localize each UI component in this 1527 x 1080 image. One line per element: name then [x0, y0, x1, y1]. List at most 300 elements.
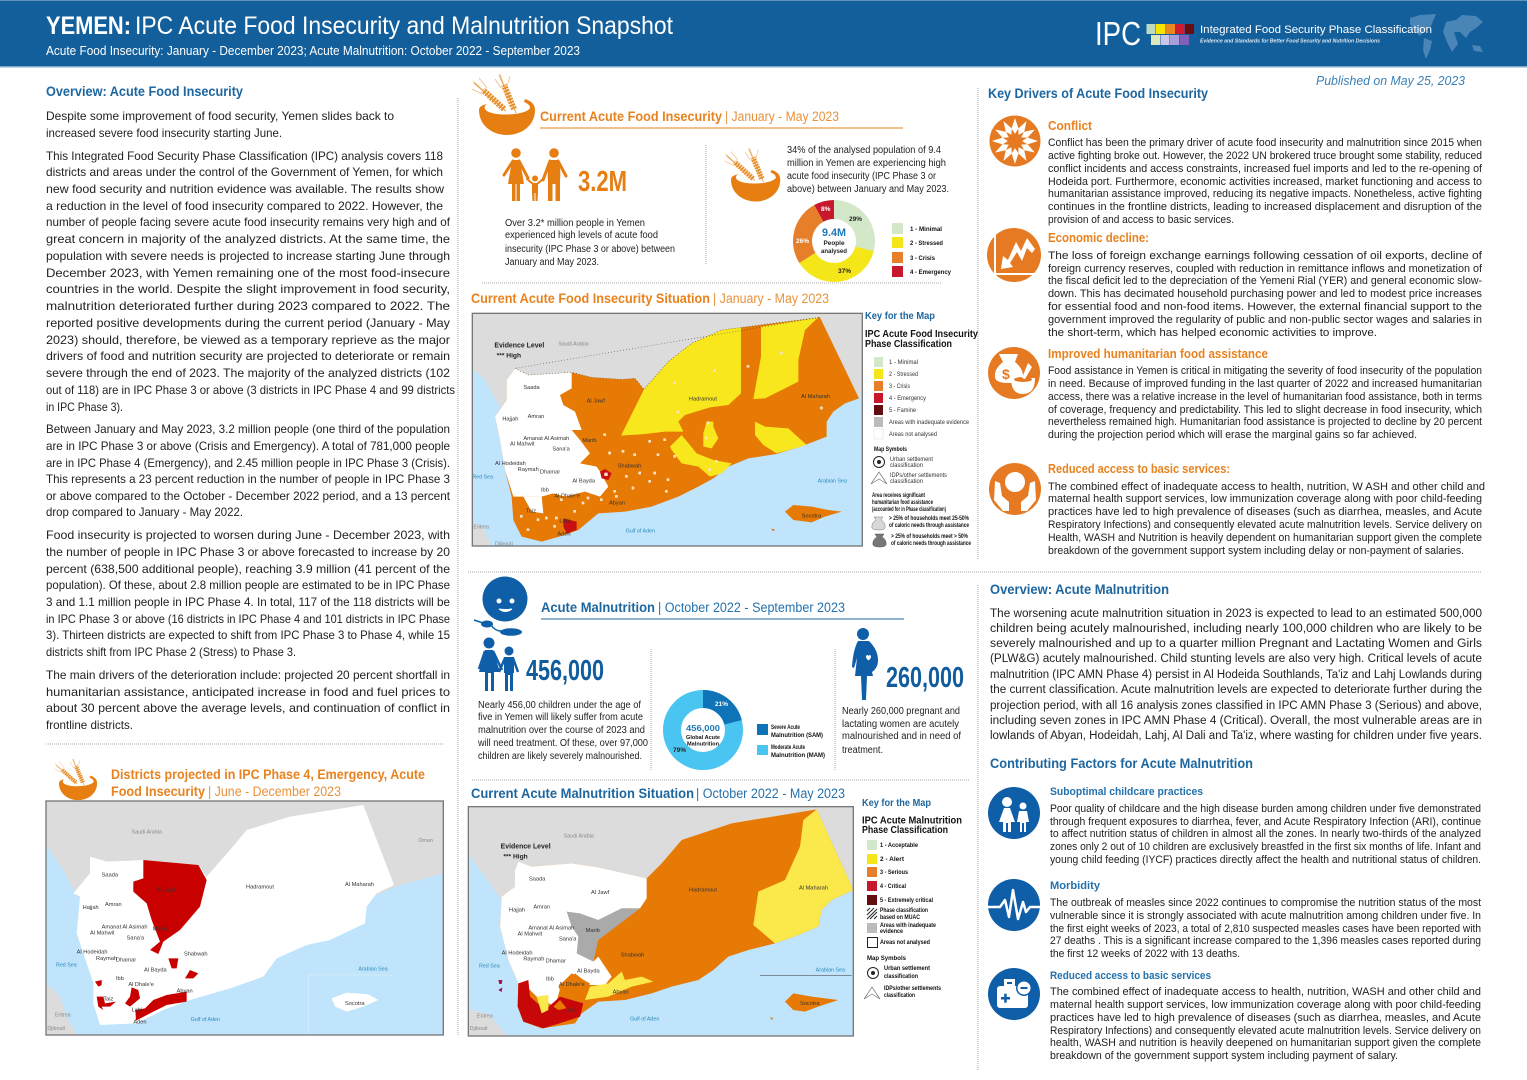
donut chart: population by phase: People [824, 240, 845, 247]
panel: projected phase 4 districts [46, 759, 443, 1035]
legend: malnutrition map key [862, 798, 962, 999]
subtitle: Acute Food Insecurity: January - December 2023; Acute Malnutrition: October 2022 - September 2023 [46, 43, 580, 58]
map: food insecurity phases: Al Bayda [572, 479, 596, 485]
map: projected phase 4 districts: Al Bayda [144, 968, 167, 974]
text block: reduced access to services: maternal health support services, low immunization coverage along with poor child-feeding [1050, 999, 1481, 1011]
map: malnutrition phases: Al Dhale'e [559, 982, 585, 988]
stat: 260,000: 260,000 [886, 662, 964, 694]
text block: economic decline: down. This has decimated household purchasing power and led to modest price increases [1048, 288, 1482, 300]
map: food insecurity phases: Amanat Al Asimah [523, 436, 569, 442]
text block: childcare: Poor quality of childcare and the high disease burden among children under five demonstrated [1050, 803, 1481, 815]
map: malnutrition phases [468, 807, 853, 1036]
text block: analysis coverage [46, 149, 455, 414]
panel: overview acute food insecurity [46, 84, 455, 732]
map: malnutrition phases: Al Jawf [591, 890, 610, 896]
map: projected phase 4 districts: Taiz [103, 997, 114, 1003]
map: projected phase 4 districts: Ibb [116, 976, 124, 982]
legend: malnutrition types: Malnutrition (MAM) [771, 753, 825, 759]
heading: key drivers: Key Drivers of Acute Food Insecurity [988, 86, 1208, 101]
legend: food insecurity map key: Key for the Map [865, 311, 935, 322]
text block: children description: five in Yemen will likely suffer from acute [478, 712, 643, 723]
legend: food insecurity map key: classification [890, 479, 923, 485]
text block: economic decline [1048, 231, 1483, 339]
text block: analysis coverage: new food security and nutrition evidence was available. The results show [46, 182, 444, 196]
map: projected phase 4 districts: Al Dhale'e [128, 982, 154, 988]
legend: donut phases [892, 223, 952, 277]
text block: conflict [1048, 119, 1483, 226]
IPC logo [1095, 14, 1483, 59]
map: projected phase 4 districts: Al Hodeidah [77, 949, 107, 955]
text block: reduced access: Health, WASH and Nutrition is heavily dependent on humanitarian support given the complete [1048, 532, 1482, 544]
text block: humanitarian assistance [1048, 347, 1482, 441]
text block: women description: treatment. [842, 745, 883, 756]
map: projected phase 4 districts: Oman [418, 838, 433, 844]
map: malnutrition phases: Amanat Al Asimah [528, 925, 574, 931]
map: projected phase 4 districts: Sana'a [127, 935, 145, 941]
legend: food insecurity map key: > 25% of households meet 25-50% [889, 516, 970, 522]
text block: reduced access to services: Respiratory Infections) and consequently elevated acute malnutrition levels. Service delivery on [1050, 1025, 1481, 1037]
text block: children description: will need treatment. Of these, over 97,000 [477, 738, 648, 749]
legend: malnutrition types: Malnutrition (SAM) [771, 733, 823, 739]
text block: analysis coverage: out of 118) are in IPC Phase 3 or above (3 districts in IPC Phase 4 and 99 districts [46, 383, 455, 397]
icon: hands and person [989, 463, 1041, 515]
map: projected phase 4 districts: Al Maharah [345, 882, 374, 888]
legend: food insecurity map key: Map Symbols [874, 447, 908, 453]
panel: key drivers [987, 86, 1485, 557]
text block: childcare: zones only 2 out of 10 children are exclusively breastfed in the first six months of life. Infant and [1050, 841, 1481, 853]
text block: reduced access: practices have led to high prevalence of diseases (such as diarrhea, measles, and Acute [1048, 506, 1482, 518]
text block: childcare: Suboptimal childcare practices [1050, 786, 1203, 798]
map: food insecurity phases: Al Mahwit [510, 441, 535, 447]
map: malnutrition phases: Hadramout [689, 888, 717, 894]
world map watermark [1410, 14, 1483, 59]
map: malnutrition phases: Al Maharah [799, 885, 828, 891]
text block: humanitarian assistance: of coverage, frequency and predictability. This led to slight decrease in food insecurity, which [1048, 404, 1482, 416]
donut chart: global acute malnutrition: 79% [673, 747, 686, 754]
legend: evidence level: *** High [503, 854, 528, 861]
text block: analysis coverage: great concern in majority of the analyzed districts. At the same time, the [46, 232, 450, 246]
text block: main drivers: humanitarian assistance, anticipated increase in food and fuel prices to [46, 685, 450, 699]
heading: malnutrition map: Current Acute Malnutrition Situation [471, 786, 694, 801]
text block: analysis coverage: drivers of food and nutrition security are projected to deteriorate or remain [46, 349, 450, 363]
text block: children description: Nearly 456,00 children under the age of [478, 700, 641, 711]
legend: food insecurity map key: IPC Acute Food Insecurity [865, 329, 978, 340]
stat: 456,000: 456,000 [526, 655, 604, 687]
map: food insecurity phases: Red Sea [472, 475, 493, 481]
text block: women description [842, 706, 961, 756]
text block: conflict: Conflict [1048, 119, 1093, 133]
map: malnutrition phases: Lahj [565, 1007, 576, 1013]
legend: evidence level: Evidence Level [494, 341, 544, 350]
icon: wheat bowl large [472, 74, 535, 135]
donut chart: global acute malnutrition: 456,000 [686, 723, 720, 733]
panel: overview acute malnutrition [990, 582, 1482, 742]
text block: women description: Nearly 260,000 pregnant and [842, 706, 960, 717]
text block: morbidity: vulnerable since it is strongly associated with acute malnutrition among children under five. In [1050, 910, 1481, 922]
donut chart: population by phase: 37% [838, 268, 851, 275]
map: malnutrition phases: Amran [533, 905, 550, 911]
donut chart: global acute malnutrition: Global Acute [686, 735, 720, 741]
text block: projection [46, 528, 450, 659]
text block: January to May figures: Between January and May 2023, 3.2 million people (one third of the population [46, 422, 450, 436]
map: projected phase 4 districts: Saada [102, 873, 119, 879]
heading: contributing factors: Contributing Factors for Acute Malnutrition [990, 756, 1253, 771]
legend: food insecurity map key: Areas not analysed [889, 432, 937, 438]
legend: malnutrition map key: 5 - Extremely critical [880, 898, 933, 904]
donut chart: population by phase: 8% [821, 206, 831, 213]
map: projected phase 4 districts: Raymah [96, 956, 117, 962]
text block: main drivers [46, 668, 450, 732]
text block: analysis coverage: number of people facing severe acute food insecurity remains very high and of [46, 215, 451, 229]
legend: evidence level [501, 842, 551, 861]
legend: food insecurity map key: Areas with inadequate evidence [889, 420, 970, 426]
text block: reduced access to services: breakdown of the government support system including payment of salary. [1050, 1050, 1398, 1062]
legend: malnutrition map key: IDPs/other settlements [884, 986, 942, 992]
map: projected phase 4 districts: Arabian Sea [358, 967, 388, 973]
text block: January to May figures: are in IPC Phase 3 or above (Crisis and Emergency). A total of 781,000 people [46, 439, 450, 453]
legend: malnutrition map key: classification [884, 974, 918, 980]
donut chart: population by phase: 26% [796, 238, 809, 245]
text block: reduced access: The combined effect of inadequate access to health, nutrition, W ASH and other child and [1048, 481, 1485, 493]
text block: malnutrition overview: the current classification. Acute malnutrition levels are expected to deteriorate further during the [990, 684, 1482, 696]
heading: projected districts: | June - December 2023 [208, 784, 341, 799]
map: malnutrition phases: Arabian Sea [816, 967, 845, 973]
text block: 34 percent description: above) between January and May 2023. [787, 184, 949, 195]
text block: childcare [1050, 786, 1481, 866]
text block: malnutrition overview: children being acutely malnourished, including nearly 100,000 children who are likely to be [990, 623, 1482, 635]
map: malnutrition phases: Saudi Arabia [564, 834, 594, 840]
icon: children [479, 638, 518, 691]
legend: malnutrition map key: Areas with inadequate [880, 923, 937, 929]
heading: overview: Overview: Acute Food Insecurity [46, 84, 243, 99]
text block: January to May figures: drop compared to January - May 2022. [46, 505, 243, 519]
heading: current food insecurity [540, 109, 903, 128]
map: projected phase 4 districts: Amran [105, 902, 122, 908]
text block: women description: malnourished and in need of [842, 731, 961, 742]
legend: evidence level: *** High [497, 353, 521, 360]
map: food insecurity phases: Hadramout [689, 397, 717, 403]
text block: reduced access [1048, 462, 1485, 557]
map: malnutrition phases: Shabwah [621, 953, 644, 959]
text block: morbidity [1050, 880, 1481, 960]
heading: malnutrition map: | October 2022 - May 2023 [696, 786, 845, 801]
text block: malnutrition overview: malnutrition (IPC AMN Phase 4) persist in Al Hodeida Southlands, Ta'iz and Lahj Lowlands during [990, 669, 1482, 681]
map: malnutrition phases: Al Bayda [577, 969, 600, 975]
text block: childcare: to affect nutrition status of children in almost all the zones. In nearly two-thirds of the analyzed [1050, 828, 1481, 840]
text block: morbidity: the first eight weeks of 2023, a total of 2,810 suspected measles cases have been reported with [1050, 923, 1481, 935]
text block: analysis coverage: a reduction in the level of food insecurity compared to 2022. However, the [46, 199, 443, 213]
text block: humanitarian assistance: nevertheless remained high. Humanitarian food assistance is projected to decline by 20 percent [1048, 416, 1482, 428]
text block: reduced access to services: practices have led to high prevalence of diseases (such as diarrhea, measles, and Acute [1050, 1012, 1481, 1024]
map: projected phase 4 districts: Lahj [132, 1008, 142, 1014]
legend: food insecurity map key: Area receives significant [872, 493, 925, 499]
legend: food insecurity map key: Phase Classification [865, 339, 952, 350]
map: food insecurity phases [472, 313, 862, 547]
donut chart: population by phase [796, 206, 866, 275]
text block: analysis coverage: 2023) should, therefore, be viewed as a temporary reprieve as the major [46, 333, 450, 347]
heading: situation map: | January - May 2023 [713, 291, 829, 306]
icon: food assistance sack and bowl: $ [1002, 366, 1010, 382]
map: projected phase 4 districts: Djibouti [47, 1026, 65, 1032]
legend: food insecurity map key: 3 - Crisis [889, 384, 910, 390]
text block: economic decline: the fiscal deficit led to the depreciation of the Yemeni Rial (YER) and general economic slow- [1048, 275, 1482, 287]
legend: donut phases: 2 - Stressed [910, 241, 943, 247]
map: food insecurity phases: Sana'a [552, 447, 571, 453]
legend: food insecurity map key: Urban settlement [890, 457, 933, 463]
map: malnutrition phases: Raymah [523, 957, 544, 963]
map: food insecurity phases: Lahj [559, 519, 570, 525]
legend: food insecurity map key: 1 - Minimal [889, 360, 918, 366]
map: malnutrition phases: Eritrea [477, 1014, 493, 1020]
text block: January to May figures [46, 422, 451, 519]
text block: analysis coverage: countries in the world. Despite the slight improvement in food security, [46, 282, 450, 296]
text block: projection: percent (638,500 additional people), reaching 3.9 million (41 percent of the [46, 562, 450, 576]
map: projected phase 4 districts: Abyan [177, 988, 193, 994]
icon: food assistance sack and bowl [988, 347, 1040, 399]
map: malnutrition phases: Marib [586, 928, 600, 934]
map: projected phase 4 districts: Eritrea [55, 1013, 71, 1019]
text block: conflict: active fighting broke out. However, the 2022 UN brokered truce brought some stability, reduced [1048, 150, 1482, 162]
legend: malnutrition map key: 4 - Critical [880, 884, 906, 890]
text block: conflict: continues in the frontline districts, leading to increased displacement and disruption of the [1048, 201, 1482, 213]
map: food insecurity phases: Eritrea [473, 525, 489, 531]
map: food insecurity phases: Amran [528, 414, 544, 420]
text block: malnutrition overview: (PLW&G) acutely malnourished. Child stunting levels are also very high. Critical levels of acute [990, 653, 1482, 665]
panel: acute malnutrition [474, 576, 964, 762]
map: malnutrition phases: Hajjah [509, 907, 525, 913]
heading: situation map: Current Acute Food Insecurity Situation [471, 291, 710, 306]
publication date: Published on May 25, 2023 [1316, 73, 1466, 88]
text block: reduced access: Respiratory Infections) and consequently elevated acute malnutrition levels. Service delivery on [1048, 519, 1482, 531]
text block: 3.2M description: insecurity (IPC Phase 3 or above) between [505, 244, 675, 255]
heading: projected districts: Districts projected in IPC Phase 4, Emergency, Acute [111, 767, 425, 782]
legend: food insecurity map key: (accounted for in Phase classification) [872, 507, 946, 513]
map: malnutrition phases: Socotra [800, 1001, 820, 1007]
text block: January to May figures: This represents a 23 percent reduction in the number of people in IPC Phase 3 [46, 472, 450, 486]
map: food insecurity phases: Raymah [518, 467, 539, 473]
text block: malnutrition overview: projection period, with all 16 analysis zones classified in IPC AMN Phase 3 (Serious) and above, [990, 700, 1482, 712]
legend: food insecurity map key: 4 - Emergency [889, 396, 926, 402]
legend: malnutrition map key: Urban settlement [884, 966, 930, 972]
donut chart: global acute malnutrition: 21% [715, 701, 728, 708]
text block: economic decline: foreign currency reserves, coupled with reduction in remittance inflows and monetization of [1048, 263, 1483, 275]
text block: 34 percent description: 34% of the analysed population of 9.4 [787, 145, 941, 156]
text block: morbidity: the first 12 weeks of 2022 with 13 deaths. [1050, 948, 1240, 960]
heading: acute malnutrition: | October 2022 - September 2023 [658, 600, 845, 615]
text block: 3.2M description: experienced high levels of acute food [505, 230, 658, 241]
text block: projection: population). Of these, about 2.8 million people are estimated to be in IPC Phase [46, 578, 450, 592]
panel: current acute food insecurity [472, 74, 952, 277]
icon: wheat bowl small [725, 148, 780, 202]
text block: January to May figures: are in IPC Phase 4 (Emergency), and 2.45 million people in IPC Phase 3 (Crisis). [46, 456, 450, 470]
text block: malnutrition overview: including seven zones in IPC AMN Phase 4 (Critical). Overall, the most vulnerable areas are in [990, 715, 1482, 727]
legend: food insecurity map key: of caloric needs through assistance [891, 541, 972, 547]
text block: humanitarian assistance: during the projection period which will erase the marginal gains so far achieved. [1048, 429, 1417, 441]
donut chart: population by phase: 9.4M [822, 227, 846, 239]
text block: reduced access to services [1050, 970, 1481, 1062]
legend: malnutrition map key: IPC Acute Malnutrition [862, 816, 962, 826]
map: projected phase 4 districts: Socotra [345, 1001, 365, 1007]
map: projected phase 4 districts: Red Sea [56, 963, 77, 969]
map: food insecurity phases: Al Dhale'e [554, 493, 580, 499]
text block: analysis coverage: population with severe needs is projected to increase starting June through [46, 249, 450, 263]
icon: medical kit [988, 968, 1040, 1020]
legend: malnutrition map key: classification [884, 993, 915, 999]
map: projected phase 4 districts: Al Jawf [157, 888, 175, 894]
panel: current acute malnutrition situation map [468, 786, 962, 1036]
text block: economic decline: Economic decline: [1048, 231, 1149, 245]
map: food insecurity phases: Ibb [541, 487, 549, 493]
legend: food insecurity map key: humanitarian food assistance [872, 500, 933, 506]
legend: malnutrition map key: 1 - Acceptable [880, 843, 919, 849]
text block: malnutrition overview: severely malnourished and up to a quarter million Pregnant and Lactating Women and Girls [990, 638, 1482, 650]
map: projected phase 4 districts [46, 801, 443, 1035]
map: projected phase 4 districts: Amanat Al Asimah [102, 924, 148, 930]
text block: projection: the number of people in IPC Phase 3 or above forecasted to increase by 20 [46, 545, 450, 559]
map: malnutrition phases: Sana'a [559, 937, 577, 943]
legend: malnutrition map key: Map Symbols [867, 956, 907, 962]
map: food insecurity phases: Abyan [609, 501, 625, 507]
legend: food insecurity map key: of caloric needs through assistance [889, 523, 970, 529]
text block: intro: Despite some improvement of food security, Yemen slides back to [46, 109, 394, 123]
text block: malnutrition overview: lowlands of Abyan, Hodeidah, Lahj, Al Dali and Ta'iz, where wasting for children under five years. [990, 730, 1482, 742]
map: food insecurity phases: Hajjah [502, 417, 518, 423]
text block: conflict: humanitarian assistance improved, reducing its negative impacts. Nonetheless, active fighting [1048, 188, 1482, 200]
panel: contributing factors [988, 756, 1481, 1062]
map: food insecurity phases: Marib [582, 438, 596, 444]
text block: reduced access to services: health, WASH and nutrition is heavily deepened on humanitarian support given the complete [1050, 1037, 1481, 1049]
text block: analysis coverage: severe through the end of 2023. The majority of the analyzed districts (102 [46, 366, 450, 380]
map: food insecurity phases: Saada [523, 385, 541, 391]
icon: family [504, 148, 566, 201]
icon: conflict burst [990, 116, 1040, 166]
text block: malnutrition overview [990, 608, 1482, 742]
heading: projected districts: Food Insecurity [111, 784, 205, 799]
legend: evidence level: Evidence Level [501, 842, 551, 851]
text block: children description [477, 700, 648, 762]
text block: conflict: conflict incidents and access constraints, increased fuel imports and led to the re-opening of [1048, 163, 1483, 175]
text block: projection: 3 and 1.1 million people in IPC Phase 4. In total, 117 of the 118 districts will be [46, 595, 450, 609]
icon: family in circle [988, 787, 1040, 839]
legend: malnutrition map key: based on MUAC [880, 915, 921, 921]
stat: 3.2M: 3.2M [578, 166, 627, 198]
map: malnutrition phases: Dhamar [546, 958, 566, 964]
text block: malnutrition overview: The worsening acute malnutrition situation in 2023 is expected to lead to an estimated 500,000 [990, 608, 1482, 620]
icon: baby face and spoon [474, 576, 528, 636]
text block: analysis coverage: This Integrated Food Security Phase Classification (IPC) analysis covers 118 [46, 149, 443, 163]
icon: pulse line [988, 879, 1040, 931]
map: food insecurity phases: Al Maharah [801, 394, 830, 400]
text block: children description: malnutrition over the course of 2023 and [478, 725, 645, 736]
donut chart: population by phase: analysed [821, 248, 847, 255]
legend: food insecurity map key: IDPs/other settlements [890, 473, 947, 479]
map: projected phase 4 districts: Gulf of Aden [191, 1017, 220, 1023]
map: projected phase 4 districts: Hadramout [246, 884, 274, 890]
legend: malnutrition map key: Phase classification [880, 908, 928, 914]
legend: malnutrition types [757, 724, 825, 759]
map: food insecurity phases: Saudi Arabia [558, 342, 589, 348]
text block: projection: districts shift from IPC Phase 2 (Stress) to Phase 3. [46, 645, 296, 659]
text block: children description: children are likely severely malnourished. [478, 751, 642, 762]
legend: donut phases: 4 - Emergency [910, 270, 952, 276]
map: malnutrition phases: Ibb [546, 977, 554, 983]
text block: analysis coverage: malnutrition deteriorated further during 2023 compared to 2022. The [46, 299, 450, 313]
legend: donut phases: 1 - Minimal [910, 227, 942, 233]
map: projected phase 4 districts: Dhamar [116, 958, 136, 964]
legend: food insecurity map key: 2 - Stressed [889, 372, 918, 378]
heading: current food insecurity: | January - May 2023 [725, 109, 839, 124]
legend: malnutrition map key: Key for the Map [862, 798, 931, 809]
text block: main drivers: The main drivers of the deterioration include: projected 20 percent shortfall in [46, 668, 450, 682]
map: malnutrition phases: Djibouti [470, 1026, 487, 1032]
legend: malnutrition map key: 2 - Alert [880, 857, 904, 863]
donut chart: population by phase: 29% [849, 216, 862, 223]
map: projected phase 4 districts: Hajjah [83, 905, 99, 911]
text block: reduced access: maternal health support services, low immunization coverage along with poor child-feeding [1048, 493, 1482, 505]
text block: 3.2M description: January and May 2023. [505, 257, 599, 268]
text block: 34 percent description: million in Yemen are experiencing high [787, 158, 946, 169]
legend: food insecurity map key: classification [890, 463, 923, 469]
legend: donut phases: 3 - Crisis [910, 256, 936, 262]
icon: economic decline chart [987, 228, 1041, 282]
text block: projection: in IPC Phase 3 or above (16 districts in IPC Phase 4 and 101 districts in IPC Phase [46, 612, 450, 626]
heading: acute malnutrition [541, 600, 904, 620]
text block: projection: Food insecurity is projected to worsen during June - December 2023, with [46, 528, 450, 542]
map: malnutrition phases: Abyan [613, 989, 629, 995]
heading: current food insecurity: Current Acute Food Insecurity [540, 109, 722, 124]
map: food insecurity phases: Shabwah [618, 463, 641, 469]
map: malnutrition phases: Al Hodeidah [502, 950, 532, 956]
text block: main drivers: frontline districts. [46, 718, 133, 732]
text block: economic decline: for essential food and non-food items. However, the external financial support to the [1048, 301, 1482, 313]
heading: acute malnutrition: Acute Malnutrition [541, 600, 655, 615]
text block: reduced access: Reduced access to basic services: [1048, 462, 1230, 476]
legend: malnutrition map key: 3 - Serious [880, 870, 909, 876]
map: projected phase 4 districts: Saudi Arabia [132, 829, 162, 835]
legend: malnutrition map key: Areas not analysed [880, 940, 930, 946]
text block: economic decline: The loss of foreign exchange earnings following cessation of oil exports, decline of [1048, 250, 1483, 262]
IPC logo: Integrated Food Security Phase Classification [1200, 24, 1432, 36]
map: food insecurity phases: Taiz [526, 509, 536, 515]
text block: reduced access to services: Reduced access to basic services [1050, 970, 1211, 982]
heading: projected districts [111, 767, 425, 799]
heading: malnutrition map [471, 786, 845, 801]
text block: morbidity: Morbidity [1050, 880, 1101, 892]
map: food insecurity phases: Gulf of Aden [626, 529, 655, 535]
text block: 34 percent description: acute food insecurity (IPC Phase 3 or [787, 171, 937, 182]
text block: humanitarian assistance: access, there was a relative increase in the level of humanitarian food assistance, both in terms [1048, 391, 1482, 403]
map: food insecurity phases: Al Hodeidah [495, 461, 526, 467]
text block: conflict: Conflict has been the primary driver of acute food insecurity and malnutrition since 2015 when [1048, 137, 1482, 149]
donut chart: global acute malnutrition: Malnutrition [687, 742, 720, 748]
map: food insecurity phases: Djibouti [495, 541, 513, 547]
text block: women description: lactating women are acutely [842, 719, 959, 730]
IPC logo: IPC [1095, 15, 1141, 52]
map: food insecurity phases: Dhamar [540, 469, 560, 475]
text block: reduced access: breakdown of the government support system including delay or non-payment of salaries. [1048, 545, 1464, 557]
title: IPC Acute Food Insecurity and Malnutrition Snapshot [135, 12, 673, 40]
legend: food insecurity map key [865, 311, 978, 547]
legend: malnutrition types: Severe Acute [771, 725, 800, 731]
map: malnutrition phases: Al Mahwit [518, 931, 543, 937]
map: food insecurity phases: Aden [557, 531, 571, 537]
text block: analysis coverage: districts and areas under the control of the Government of Yemen, for which [46, 165, 443, 179]
panel: current food insecurity situation map [471, 291, 978, 547]
text block: projection: 3). Thirteen districts are expected to shift from IPC Phase 3 to Phase 4, while 15 [46, 628, 450, 642]
donut chart: global acute malnutrition [672, 699, 734, 761]
map: food insecurity phases: Socotra [802, 513, 822, 519]
text block: morbidity: 27 deaths . This is a significant increase compared to the 1,396 measles cases reported during [1050, 935, 1481, 947]
